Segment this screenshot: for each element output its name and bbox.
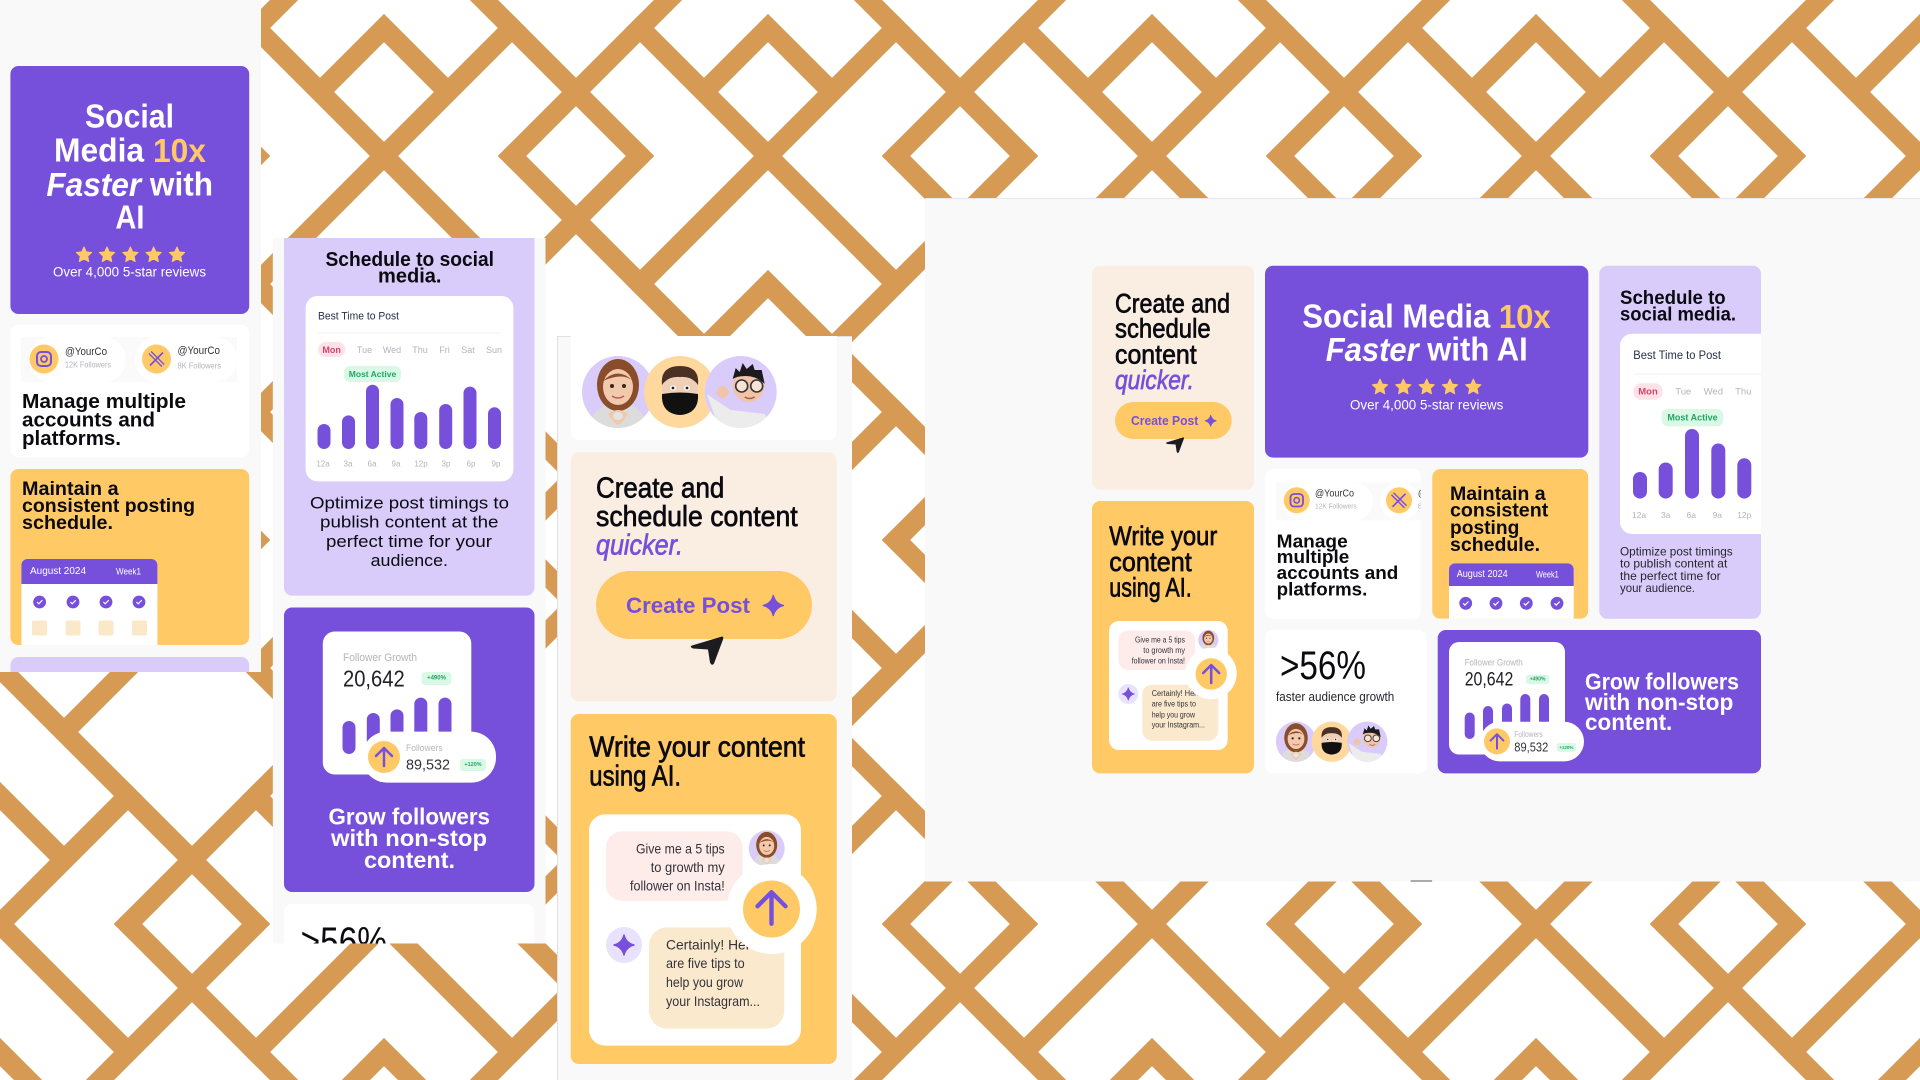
grow followers card [284, 608, 534, 892]
AI writing card: are five tips to [1152, 700, 1196, 708]
clipped lilac card [10, 657, 250, 672]
posting schedule card: consistent [1450, 500, 1549, 522]
best time chart: 6a [1687, 510, 1696, 520]
social accounts card: 12K Followers [65, 360, 111, 370]
posting schedule card: Week1 [116, 566, 141, 576]
hero card: Social [85, 98, 174, 134]
create post card: content [1115, 339, 1197, 369]
AI writing card: Give me a 5 tips [636, 840, 725, 856]
best time chart: Most Active [349, 369, 396, 379]
followers pill: Followers [406, 743, 443, 754]
posting schedule card: posting [1450, 517, 1519, 539]
best time chart: Wed [1704, 386, 1723, 397]
posting schedule card: August 2024 [1457, 569, 1508, 580]
best time chart: 12p [414, 460, 428, 468]
posting schedule card: schedule. [1450, 534, 1540, 556]
schedule card: audience. [371, 551, 448, 570]
grow followers card: +490% [427, 676, 447, 682]
posting schedule card: August 2024 [30, 566, 86, 577]
AI writing card: Write your content [589, 732, 805, 764]
social accounts card [22, 344, 221, 449]
stat card clipped [302, 927, 386, 944]
social accounts card: 8K Followers [178, 362, 221, 370]
schedule card: publish content at the [320, 512, 498, 532]
best time chart: Fri [439, 345, 450, 355]
panel: second mobile layout [273, 220, 546, 984]
AI writing card: using AI. [1109, 572, 1192, 602]
AI writing card: Certainly! Here [1152, 689, 1201, 698]
stat card: >56% [1280, 644, 1366, 688]
best time chart: 9a [1713, 510, 1722, 520]
best time chart: Thu [412, 345, 428, 355]
create post card [1092, 266, 1254, 490]
AI writing card: Certainly! Here [666, 936, 758, 952]
hero card: Faster with [46, 166, 213, 202]
posting schedule card [10, 469, 249, 659]
best time chart: Most Active [1667, 413, 1718, 423]
create post card: Create and [596, 473, 724, 505]
social accounts card: platforms. [22, 428, 121, 450]
schedule card: perfect time for your [326, 532, 492, 551]
best time chart: 3a [1661, 510, 1671, 520]
panel: left mobile layout [0, 0, 261, 697]
social accounts card: 12K Followers [1315, 502, 1357, 510]
best time chart: 6a [368, 460, 377, 468]
best time chart: Sat [461, 345, 475, 355]
schedule card: Schedule to social [326, 249, 494, 271]
best time chart: 9p [492, 460, 501, 468]
AI writing card: your Instagram... [1152, 721, 1205, 730]
posting schedule card: Maintain a [1450, 483, 1546, 505]
social accounts card [1277, 487, 1421, 600]
schedule card: social media. [1620, 305, 1736, 326]
AI writing card [571, 714, 837, 1064]
followers pill: +120% [1559, 745, 1573, 750]
grow followers card: Grow followers [328, 804, 490, 830]
followers pill: 89,532 [1514, 740, 1548, 754]
AI writing card: help you grow [666, 974, 744, 990]
schedule card: the perfect time for [1620, 569, 1721, 583]
best time chart: Best Time to Post [318, 311, 399, 323]
best time chart: 6p [467, 460, 476, 468]
social accounts card: accounts and [1277, 562, 1398, 583]
schedule card [284, 220, 534, 596]
hero card [1265, 266, 1588, 458]
posting schedule card [1432, 469, 1588, 633]
hero card: Faster with AI [1326, 331, 1528, 368]
posting schedule card: consistent posting [22, 495, 195, 517]
hero card: Over 4,000 5-star reviews [53, 264, 206, 280]
social accounts card: platforms. [1277, 579, 1367, 600]
create post card: schedule [1115, 314, 1211, 344]
social accounts card: 8 [1418, 502, 1422, 510]
schedule card [1599, 266, 1761, 619]
AI writing card: to growth my [1143, 646, 1185, 655]
grow followers card: content. [364, 847, 455, 873]
avatars card [570, 336, 837, 428]
best time chart: 9a [392, 460, 401, 468]
best time chart: 12a [1632, 510, 1646, 520]
grow followers card [1438, 630, 1761, 773]
best time chart [1620, 334, 1761, 534]
panel: third mobile layout [557, 320, 852, 1080]
best time chart: Thu [1735, 386, 1751, 397]
best time chart [306, 296, 513, 481]
best time chart: 3a [344, 460, 353, 468]
AI writing card: help you grow [1152, 710, 1195, 720]
schedule card: your audience. [1620, 581, 1695, 595]
best time chart: Wed [383, 345, 401, 355]
grow followers card: Follower Growth [1465, 658, 1523, 668]
hero card: Social Media 10x [1302, 298, 1551, 334]
hero card: AI [115, 198, 144, 236]
social accounts card: @YourCo [65, 346, 107, 358]
create post card: schedule content [596, 501, 798, 533]
followers pill: Followers [1514, 730, 1543, 739]
panel: desktop layout [925, 198, 1920, 882]
AI writing card [1092, 501, 1254, 773]
stat card clipped: >56% [301, 920, 387, 964]
create post card: quicker. [1115, 365, 1194, 395]
posting schedule card: schedule. [22, 512, 113, 534]
best time chart: 12p [1737, 510, 1752, 520]
grow followers card: Follower Growth [343, 652, 417, 664]
best time chart: Tue [1675, 386, 1691, 397]
AI writing card: to growth my [651, 859, 725, 875]
social accounts card: accounts and [22, 410, 155, 432]
stat card [1265, 630, 1427, 773]
best time chart: 3p [442, 460, 451, 468]
AI writing card: content [1109, 547, 1192, 577]
grow followers card: Grow followers [1585, 668, 1739, 694]
best time chart: Best Time to Post [1633, 350, 1722, 362]
create post card [571, 452, 837, 702]
grow followers card: with non-stop [330, 825, 487, 851]
best time chart: 12a [316, 460, 330, 468]
AI writing card: using AI. [589, 761, 681, 793]
social accounts card: Manage multiple [22, 391, 186, 413]
AI writing card: are five tips to [666, 955, 745, 971]
best time chart: Mon [1638, 386, 1658, 397]
best time chart: Tue [357, 345, 372, 355]
schedule card: Optimize post timings to [310, 494, 509, 512]
social accounts card: Manage [1277, 530, 1348, 552]
grow followers card: with non-stop [1584, 689, 1733, 715]
schedule card: Schedule to [1620, 288, 1726, 309]
stat card: faster audience growth [1276, 689, 1394, 704]
AI writing card: Write your [1109, 521, 1217, 551]
followers pill [1480, 722, 1584, 761]
AI writing card: follower on Insta! [630, 878, 725, 894]
create post card: quicker. [596, 529, 683, 561]
AI writing card: Give me a 5 tips [1135, 636, 1185, 644]
followers pill: +120% [464, 762, 482, 768]
grow followers card: 20,642 [1465, 668, 1513, 690]
posting schedule card: Week1 [1536, 570, 1559, 580]
grow followers card: content. [1585, 709, 1672, 735]
hero card: Media 10x [54, 132, 207, 168]
best time chart: Sun [486, 345, 502, 355]
schedule card: to publish content at [1620, 557, 1728, 571]
social accounts card: @YourCo [178, 345, 220, 357]
create post card: Create and [1115, 288, 1230, 318]
schedule card: Optimize post timings [1620, 545, 1733, 559]
followers pill: 89,532 [406, 756, 450, 774]
social accounts card: multiple [1277, 546, 1349, 567]
schedule card: media. [378, 266, 442, 288]
AI writing card: your Instagram... [666, 993, 760, 1009]
followers pill [362, 732, 496, 783]
social accounts card: @ [1418, 488, 1428, 500]
hero card: Over 4,000 5-star reviews [1350, 398, 1504, 412]
best time chart: Mon [322, 345, 341, 355]
posting schedule card: Maintain a [22, 478, 119, 500]
hero card [10, 66, 249, 314]
grow followers card: 20,642 [343, 666, 405, 692]
social accounts card: @YourCo [1315, 488, 1354, 500]
grow followers card: +490% [1530, 676, 1546, 682]
create post card: Create Post [626, 593, 751, 618]
AI writing card: follower on Insta! [1132, 656, 1185, 665]
create post card: Create Post [1131, 414, 1199, 428]
